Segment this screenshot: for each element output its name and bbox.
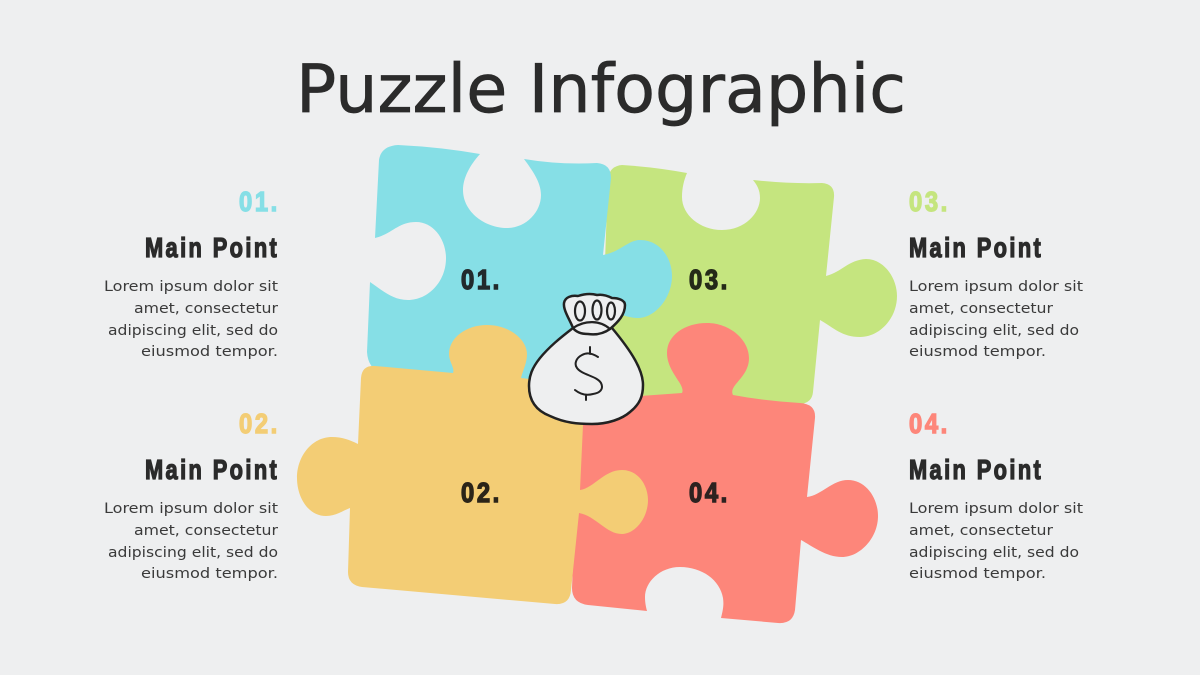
- body text: Lorem ipsum dolor sit: [909, 501, 1084, 517]
- label 01 on blue piece: 01.: [461, 263, 499, 295]
- puzzle piece 02: yellow: [297, 325, 648, 604]
- body text: [909, 279, 1084, 360]
- body text: amet, consectetur: [909, 523, 1053, 539]
- text block: point 04: [909, 407, 1084, 582]
- body text: adipiscing elit, sed do: [108, 323, 278, 339]
- puzzle number labels: [461, 263, 727, 508]
- label 02 on yellow piece: 02.: [461, 476, 499, 508]
- title: Puzzle Infographic: [296, 50, 906, 128]
- number 01: 01.: [239, 185, 277, 217]
- body text: Lorem ipsum dolor sit: [104, 501, 279, 517]
- body text: adipiscing elit, sed do: [909, 545, 1079, 561]
- heading: Main Point: [909, 454, 1041, 486]
- number 02: 02.: [239, 407, 277, 439]
- body text: [909, 501, 1084, 582]
- heading: Main Point: [909, 232, 1041, 264]
- icon: money bag: [529, 294, 643, 424]
- text block: point 01: [104, 185, 279, 360]
- text block: point 03: [909, 185, 1084, 360]
- body text: eiusmod tempor.: [141, 344, 278, 360]
- body text: eiusmod tempor.: [909, 566, 1046, 582]
- body text: [104, 501, 279, 582]
- puzzle piece 01: blue: [367, 145, 672, 400]
- body text: [104, 279, 279, 360]
- body text: amet, consectetur: [134, 301, 278, 317]
- body text: Lorem ipsum dolor sit: [104, 279, 279, 295]
- heading: Main Point: [145, 454, 277, 486]
- label 03 on green piece: 03.: [689, 263, 727, 295]
- body text: amet, consectetur: [134, 523, 278, 539]
- text block: point 02: [104, 407, 279, 582]
- body text: eiusmod tempor.: [141, 566, 278, 582]
- number 04: 04.: [909, 407, 947, 439]
- puzzle: four interlocking pieces: [297, 145, 897, 623]
- puzzle piece 03: green: [600, 165, 897, 404]
- body text: adipiscing elit, sed do: [108, 545, 278, 561]
- body text: adipiscing elit, sed do: [909, 323, 1079, 339]
- body text: eiusmod tempor.: [909, 344, 1046, 360]
- label 04 on red piece: 04.: [689, 476, 727, 508]
- body text: amet, consectetur: [909, 301, 1053, 317]
- heading: Main Point: [145, 232, 277, 264]
- body text: Lorem ipsum dolor sit: [909, 279, 1084, 295]
- number 03: 03.: [909, 185, 947, 217]
- puzzle piece 04: red: [572, 323, 878, 623]
